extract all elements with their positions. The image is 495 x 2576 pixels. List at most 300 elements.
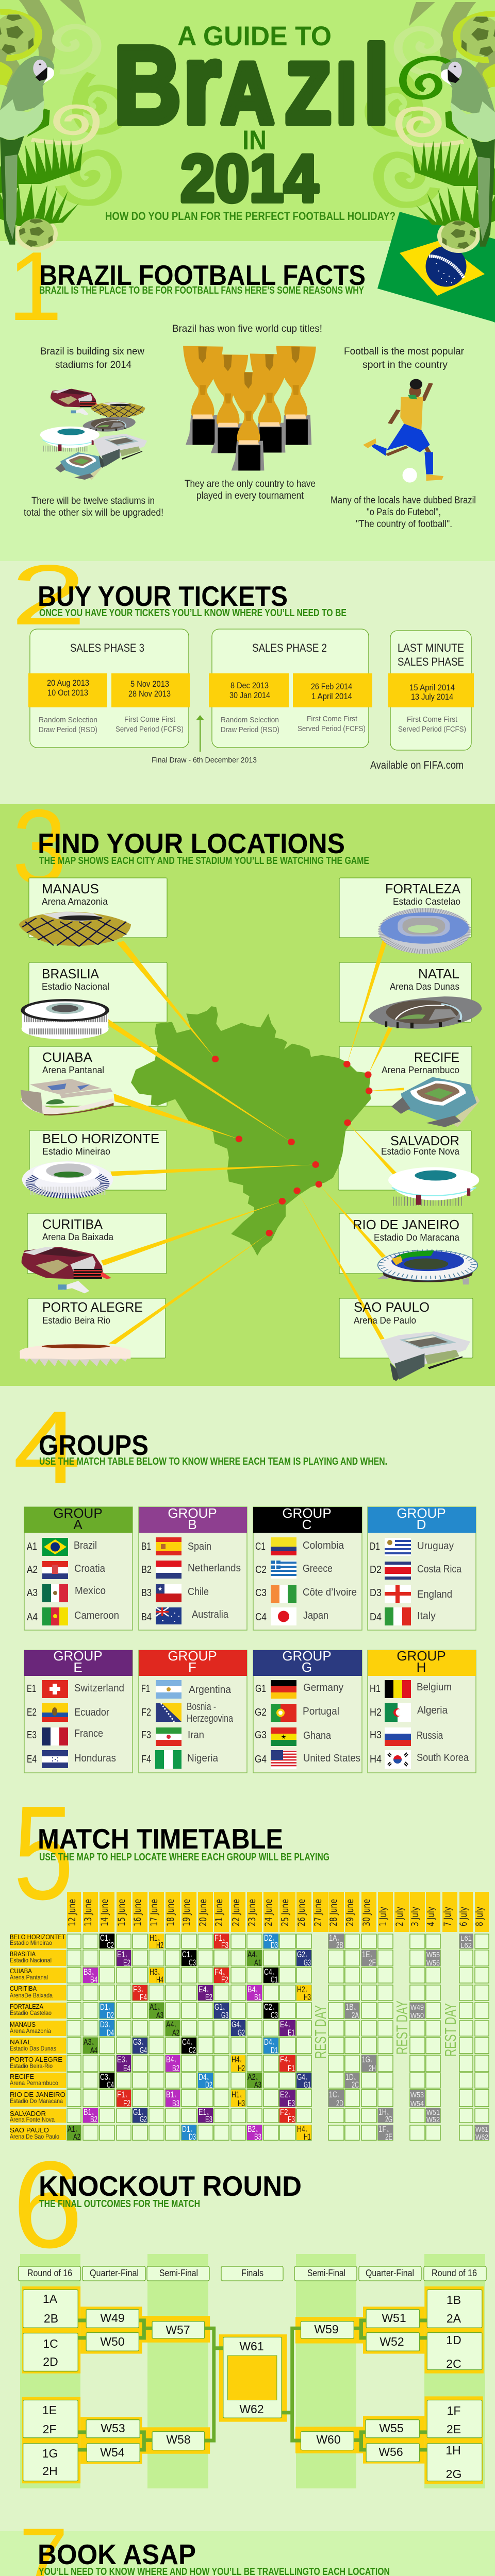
- row matches: Sao Paulo: A1 v.: [68, 2124, 77, 2134]
- panel: group H: Russia: [417, 1730, 443, 1741]
- fact: twelve stadiums: total the other six will be upgraded!: [24, 507, 163, 518]
- panel: group D: D: [417, 1517, 426, 1532]
- title: Brazil: r: [183, 19, 221, 147]
- row matches: Recife: A2 v.: [248, 2072, 258, 2082]
- row matches: Rio de Janeiro: 1C v.: [329, 2090, 339, 2099]
- bracket yellow blocks: [22, 2286, 484, 2484]
- panel: group G: G3: [255, 1730, 267, 1741]
- panel: group G: United States: [303, 1753, 360, 1764]
- timetable venue labels: RECIFE: [10, 2073, 34, 2080]
- row matches: Manaus: D4: [107, 2028, 114, 2038]
- row matches: Sao Paulo: A2: [73, 2132, 80, 2142]
- panel: group C: [253, 1505, 362, 1630]
- row matches: Porto Alegre: E4: [123, 2063, 130, 2073]
- city cards backgrounds: [27, 878, 473, 1358]
- panel: sales phase 3: [28, 629, 190, 748]
- panel: group D: [368, 1505, 476, 1630]
- panel: group E: [24, 1648, 133, 1773]
- bracket labels: 2C: [446, 2357, 461, 2370]
- row matches: Sao Paulo: H4 v.: [297, 2124, 307, 2134]
- row matches: Salvador: F2 v.: [280, 2107, 290, 2117]
- panel: group E: E2: [27, 1707, 37, 1718]
- bracket labels: 2F: [43, 2422, 56, 2436]
- bracket stage headers: Round of 16: [432, 2268, 477, 2278]
- heading: book asap: BOOK ASAP: [38, 2538, 196, 2570]
- panel: sales phase 2: SALES PHASE 2: [252, 641, 327, 654]
- timetable venue labels: CUIABA: [10, 1967, 32, 1975]
- row matches: Salvador: [83, 2107, 440, 2124]
- sections 4 to 6 background: [0, 1386, 495, 2531]
- panel: group B: Spain: [188, 1541, 211, 1552]
- row matches: Recife: D2: [205, 2080, 212, 2090]
- bracket labels: 1H: [446, 2444, 461, 2457]
- connector lines: [101, 939, 404, 1344]
- timetable venue labels: PORTO ALEGRE: [10, 2056, 62, 2063]
- panel: group B: Chile: [188, 1586, 209, 1598]
- heading: Brazil football facts: BRAZIL FOOTBALL FACTS: [39, 259, 366, 291]
- left city labels: PORTO ALEGRE: [42, 1299, 143, 1315]
- rest day labels: REST DAY: [441, 2003, 459, 2057]
- row matches: Sao Paulo: W62: [475, 2133, 488, 2142]
- heading: knockout round: KNOCKOUT ROUND: [39, 2170, 302, 2202]
- row matches: Curitiba: F3 v.: [133, 1985, 143, 1994]
- panel: group D: England: [417, 1589, 452, 1600]
- row matches: Belo Horizonte: F3: [221, 1940, 228, 1950]
- panel: group C: C: [302, 1517, 311, 1532]
- row matches: Cuiaba: H3 v.: [150, 1967, 160, 1977]
- row matches: Cuiaba: F4 v.: [214, 1967, 225, 1977]
- row matches: Rio de Janeiro: E3: [288, 2098, 295, 2108]
- row matches: Cuiaba: [83, 1967, 278, 1985]
- bracket stage headers: Semi-Final: [159, 2268, 198, 2278]
- timetable date header: 17 June: [148, 1899, 160, 1926]
- panel: sales phase 2: Random Selection: [221, 716, 279, 724]
- row matches: Rio de Janeiro: W53: [410, 2091, 424, 2099]
- panel: sales phase 3: First Come First: [124, 715, 176, 724]
- row matches: Salvador: 2G: [385, 2114, 392, 2124]
- timetable venue labels: BRASITIA: [10, 1950, 36, 1958]
- panel: group A: GROUP: [53, 1505, 103, 1521]
- left city labels: CUIABA: [42, 1049, 93, 1065]
- heading: find your locations: THE MAP SHOWS EACH CITY AND THE STADIUM YOU’LL BE WATCHING THE GAME: [39, 855, 369, 867]
- panel: group F: F2: [141, 1707, 151, 1718]
- row matches: Curitiba: E2: [205, 1992, 212, 2002]
- panel: group F: [139, 1648, 247, 1773]
- row matches: Porto Alegre: B4 v.: [166, 2055, 176, 2064]
- row matches: Porto Alegre: E3 v.: [117, 2055, 127, 2064]
- row matches: Salvador: B1 v.: [84, 2107, 94, 2117]
- panel: group B: B: [188, 1517, 197, 1532]
- row matches: Rio de Janeiro: W54: [410, 2099, 424, 2108]
- panel: group F: Argentina: [189, 1684, 232, 1696]
- panel: group A: A: [73, 1517, 82, 1532]
- heading: groups: USE THE MATCH TABLE BELOW TO KNOW WHERE EACH TEAM IS PLAYING AND WHEN.: [39, 1456, 387, 1467]
- row matches: Salvador: B2: [90, 2114, 97, 2124]
- panel: group C: Côte d’Ivoire: [303, 1587, 357, 1598]
- row matches: Sao Paulo: D1 v.: [182, 2124, 192, 2134]
- panel: group E: Honduras: [74, 1753, 116, 1764]
- fact: only country: They are the only country to have: [185, 479, 316, 489]
- fact: only country: played in every tournament: [196, 490, 304, 501]
- row matches: Cuiaba: B3 v.: [84, 1967, 94, 1977]
- row matches: Manaus: E4 v.: [280, 2020, 290, 2029]
- panel: group B: B1: [141, 1541, 151, 1552]
- panel: group H: South Korea: [417, 1752, 469, 1764]
- bracket labels: 1B: [447, 2293, 461, 2307]
- heading: Brazil football facts: BRAZIL IS THE PLACE TO BE FOR FOOTBALL FANS HERE’S SOME REASONS WHY: [39, 285, 365, 296]
- row matches: Rio de Janeiro: H3: [238, 2098, 245, 2108]
- row matches: Porto Alegre: H4 v.: [232, 2055, 242, 2064]
- Brazilian flag: [377, 212, 495, 323]
- panel: sales phase 2: 1 April 2014: [311, 691, 352, 701]
- panel: group E: Switzerland: [74, 1683, 124, 1694]
- timetable date header: 21 June: [213, 1899, 225, 1926]
- left city labels: BELO HORIZONTE: [42, 1131, 159, 1146]
- fact: new stadiums: stadiums for 2014: [55, 360, 131, 370]
- bracket labels: 2A: [447, 2312, 461, 2325]
- row matches: Recife: 1D v.: [345, 2072, 356, 2082]
- timetable date header: 16 June: [132, 1899, 143, 1926]
- row matches: Porto Alegre: 2H: [369, 2063, 376, 2073]
- bracket labels: W55: [379, 2421, 404, 2435]
- bracket labels: W52: [380, 2335, 404, 2348]
- row matches: Natal: D1: [271, 2045, 278, 2055]
- left city labels: Arena Da Baixada: [42, 1232, 114, 1242]
- right city labels: NATAL: [418, 966, 459, 981]
- row matches: Natal: A3 v.: [84, 2037, 94, 2047]
- bracket labels: W61: [239, 2340, 264, 2353]
- timetable date header: 13 June: [82, 1899, 94, 1926]
- timetable venue labels: FORTALEZA: [10, 2003, 43, 2010]
- row matches: Belo Horizonte: H2: [156, 1940, 163, 1950]
- fact: country of football: "The country of football".: [356, 519, 452, 530]
- row matches: Curitiba: H3: [304, 1992, 311, 2002]
- row matches: Fortaleza: C3: [271, 2010, 278, 2020]
- panel: group H: Belgium: [417, 1682, 452, 1693]
- row matches: Salvador: W51: [426, 2108, 440, 2117]
- right city labels: SALVADOR: [390, 1133, 459, 1148]
- row matches: Fortaleza: C2 v.: [264, 2002, 274, 2012]
- fact: most popular sport: sport in the country: [362, 360, 448, 370]
- rest day labels: REST DAY: [393, 2001, 411, 2055]
- row matches: Curitiba: B4 v.: [248, 1985, 258, 1994]
- row matches: Fortaleza: A1 v.: [150, 2002, 160, 2012]
- timetable date header: 3 July: [409, 1907, 421, 1926]
- timetable venue labels: BELO HORIZONTET: [10, 1933, 65, 1941]
- panel: sales phase 3: 10 Oct 2013: [47, 688, 88, 698]
- left city labels: BRASILIA: [42, 966, 100, 981]
- row matches: Manaus: A4 v.: [166, 2020, 176, 2029]
- heading: buy your tickets: BUY YOUR TICKETS: [38, 580, 288, 612]
- bracket labels: W57: [166, 2323, 190, 2336]
- left city labels: Estadio Mineirao: [42, 1146, 110, 1157]
- row matches: Fortaleza: W49: [410, 2003, 424, 2012]
- row matches: Recife: 2C: [352, 2080, 359, 2090]
- subtitle: HOW DO YOU PLAN FOR THE PERFECT FOOTBALL HOLIDAY?: [105, 210, 395, 223]
- footballer: [363, 379, 443, 483]
- panel: group E: GROUP: [53, 1648, 103, 1664]
- five trophies: [183, 346, 316, 470]
- timetable date header: 6 July: [458, 1907, 469, 1926]
- row matches: Brasilia: A1: [254, 1958, 261, 1968]
- row matches: Curitiba: B1: [254, 1992, 261, 2002]
- panel: group B: Australia: [192, 1609, 229, 1620]
- row matches: Manaus: G2: [238, 2028, 245, 2038]
- timetable date header: 15 June: [116, 1899, 127, 1926]
- bracket stage headers: Quarter-Final: [90, 2268, 139, 2278]
- fact: twelve stadiums: There will be twelve stadiums in: [31, 496, 155, 506]
- row matches: Brasilia: W55: [426, 1951, 440, 1959]
- panel: group A: A1: [27, 1541, 37, 1552]
- timetable date header: 7 July: [442, 1907, 453, 1926]
- panel: group H: H4: [370, 1754, 382, 1765]
- row matches: Salvador: F3: [288, 2114, 295, 2124]
- timetable venue labels: CURITIBA: [10, 1985, 37, 1992]
- section number 3: 3: [12, 788, 67, 906]
- row matches: Sao Paulo: H1: [304, 2132, 311, 2142]
- title: 2014: 2014: [180, 141, 318, 216]
- timetable date header: 18 June: [165, 1899, 176, 1926]
- bracket stage headers: [19, 2266, 486, 2281]
- right city labels: FORTALEZA: [385, 881, 461, 896]
- section number 4: 4: [13, 1390, 81, 1505]
- bracket labels: 1D: [446, 2333, 461, 2347]
- panel: group B: Netherlands: [188, 1563, 241, 1574]
- timetable venue labels: MANAUS: [10, 2021, 36, 2028]
- row matches: Brasilia: [117, 1950, 440, 1968]
- timetable date header: 20 June: [197, 1899, 209, 1926]
- header background: [0, 0, 495, 241]
- row matches: Curitiba: E4 v.: [199, 1985, 209, 1994]
- panel: group F: F4: [141, 1754, 151, 1765]
- timetable venue labels: Estadio Beira-Rio: [10, 2062, 53, 2070]
- left city labels: Estadio Beira Rio: [42, 1315, 110, 1326]
- title: Brazil: B: [113, 24, 182, 147]
- row matches: Porto Alegre: F1: [288, 2063, 295, 2073]
- row matches: Fortaleza: D1 v.: [100, 2002, 110, 2012]
- panel: group B: [139, 1505, 247, 1630]
- fact: five titles: Brazil has won five world cup titles!: [172, 324, 322, 334]
- heading: book asap: [38, 2538, 390, 2576]
- panel: group B: B3: [141, 1587, 152, 1599]
- fact: new stadiums: [40, 346, 144, 370]
- bracket cards: [23, 2290, 482, 2481]
- panel: sales phase 2: 30 Jan 2014: [229, 690, 270, 700]
- row matches: Rio de Janeiro: H1 v.: [232, 2090, 242, 2099]
- bracket labels: 1C: [43, 2337, 58, 2350]
- right city labels: Estadio Castelao: [393, 896, 460, 907]
- timetable date header: 23 June: [246, 1899, 258, 1926]
- panel: last minute sales phase: [388, 631, 474, 750]
- panel: last minute sales phase: LAST MINUTE: [398, 641, 464, 654]
- panel: group G: G4: [255, 1754, 267, 1765]
- row matches: Porto Alegre: B2: [172, 2063, 179, 2073]
- panel: group C: C1: [255, 1541, 266, 1552]
- row matches: Belo Horizonte: 1A v.: [329, 1933, 339, 1943]
- bracket labels: W50: [100, 2335, 125, 2348]
- row matches: Natal: A4: [90, 2045, 97, 2055]
- row matches: Belo Horizonte: 2B: [336, 1940, 343, 1950]
- panel: sales phase 3: 20 Aug 2013: [47, 678, 89, 688]
- panel: sales phase 2: First Come First: [307, 715, 358, 723]
- row matches: Fortaleza: 1B v.: [345, 2002, 356, 2012]
- timetable venue labels: Estadio Mineirao: [10, 1939, 52, 1946]
- row matches: Salvador: E1 v.: [199, 2107, 209, 2117]
- panel: group E: E3: [27, 1730, 37, 1741]
- panel: last minute sales phase: SALES PHASE: [398, 655, 464, 668]
- timetable date header: 8 July: [474, 1907, 485, 1926]
- section number 1: 1: [8, 232, 62, 341]
- section number 5: 5: [13, 1778, 74, 1928]
- bracket labels: W54: [100, 2446, 125, 2459]
- row matches: Cuiaba: H4: [156, 1975, 163, 1985]
- panel: group C: C2: [255, 1564, 267, 1575]
- panel: sales phase 2: Draw Period (RSD): [221, 725, 279, 734]
- left jungle decoration: parrot, ball, palms, swirls: [0, 0, 125, 251]
- panel: sales phase 3: Draw Period (RSD): [39, 725, 97, 734]
- panel: group F: F1: [141, 1683, 150, 1694]
- timetable date header: [67, 1892, 489, 1932]
- panel: sales phase 2: 26 Feb 2014: [311, 682, 352, 691]
- right jungle decoration: parrot, ball, palms, swirls: [370, 2, 495, 253]
- row matches: Brasilia: 1E v.: [362, 1950, 372, 1959]
- right city labels: SAO PAULO: [354, 1299, 430, 1315]
- row matches: Salvador: G2: [140, 2114, 147, 2124]
- right city labels: RECIFE: [414, 1049, 459, 1065]
- row matches: Natal: [83, 2037, 278, 2055]
- panel: group E: E: [73, 1659, 82, 1675]
- panel: sales phase 3: SALES PHASE 3: [70, 641, 144, 654]
- row matches: Belo Horizonte: D3: [271, 1940, 278, 1950]
- bracket labels: 1E: [42, 2403, 57, 2417]
- row matches: Porto Alegre: 1G v.: [362, 2055, 372, 2064]
- bracket labels: W51: [382, 2311, 406, 2325]
- panel: last minute sales phase: Served Period (FCFS): [398, 725, 466, 734]
- timetable date header: 12 June: [67, 1899, 78, 1926]
- panel: group C: GROUP: [282, 1505, 332, 1521]
- row matches: Manaus: [100, 2020, 295, 2038]
- left city labels: Arena Amazonia: [42, 896, 108, 907]
- row matches: Sao Paulo: B2 v.: [248, 2124, 258, 2134]
- row matches: Porto Alegre: [117, 2055, 376, 2073]
- row matches: Brasilia: C1 v.: [182, 1950, 192, 1959]
- row matches: Natal: C2: [189, 2045, 196, 2055]
- panel: group H: H2: [370, 1707, 382, 1718]
- timetable date header: 4 July: [425, 1907, 437, 1926]
- row matches: Recife: C3 v.: [100, 2072, 110, 2082]
- panel: group A: Mexico: [75, 1585, 106, 1597]
- timetable venue labels: SAO PAULO: [10, 2126, 49, 2134]
- row matches: Brasilia: G2 v.: [297, 1950, 307, 1959]
- section 7 background: [0, 2531, 495, 2576]
- row matches: Belo Horizonte: C2: [107, 1940, 114, 1950]
- panel: group F: GROUP: [168, 1648, 217, 1664]
- timetable date header: 25 June: [279, 1899, 291, 1926]
- panel: group C: Greece: [303, 1563, 333, 1574]
- left city labels: CURITIBA: [42, 1216, 103, 1232]
- heading: groups: [39, 1429, 387, 1467]
- right city labels: RIO DE JANEIRO: [353, 1217, 459, 1232]
- row matches: Curitiba: F4: [140, 1992, 147, 2002]
- row matches: Sao Paulo: W61: [475, 2125, 488, 2134]
- bracket stage headers: Quarter-Final: [366, 2268, 414, 2278]
- panel: group C: Colombia: [303, 1540, 344, 1551]
- right city labels: Estadio Fonte Nova: [381, 1146, 460, 1157]
- row matches: Fortaleza: G3: [221, 2010, 228, 2020]
- panel: group F: Herzegovina: [187, 1713, 234, 1724]
- bracket stage headers: Semi-Final: [307, 2268, 345, 2278]
- panel: group F: Nigeria: [187, 1753, 219, 1764]
- row matches: Recife: A3: [254, 2080, 261, 2090]
- bracket labels: [42, 2292, 461, 2481]
- panel: group D: Italy: [417, 1611, 436, 1622]
- bracket labels: 2G: [446, 2467, 461, 2481]
- row matches: Belo Horizonte: L62: [460, 1941, 472, 1950]
- panel: sales phase 2: 8 Dec 2013: [230, 681, 269, 690]
- row matches: Brasilia: G3: [304, 1958, 311, 1968]
- panel: group H: H: [417, 1659, 426, 1675]
- timetable date header: 2 July: [394, 1907, 405, 1926]
- city pins: [212, 1056, 372, 1236]
- row matches: Natal: D4 v.: [264, 2037, 274, 2047]
- row matches: Rio de Janeiro: 2D: [336, 2098, 343, 2108]
- row matches: Rio de Janeiro: F2: [123, 2098, 130, 2108]
- left city labels: Estadio Nacional: [42, 981, 109, 992]
- panel: group A: Croatia: [74, 1563, 106, 1574]
- timetable venue labels: Arena Pernambuco: [10, 2079, 58, 2087]
- panel: last minute sales phase: First Come First: [407, 715, 458, 724]
- bracket column backgrounds: [20, 2254, 485, 2488]
- row matches: Fortaleza: W50: [410, 2011, 424, 2020]
- fact: twelve stadiums: [24, 496, 163, 518]
- row matches: Rio de Janeiro: F1 v.: [117, 2090, 127, 2099]
- timetable grid cells: [67, 1934, 489, 2140]
- panel: group D: D1: [370, 1541, 380, 1552]
- timetable venue labels: Arena Pantanal: [10, 1974, 48, 1981]
- row matches: Curitiba: H2 v.: [297, 1985, 307, 1994]
- row matches: Rio de Janeiro: E2 v.: [280, 2090, 290, 2099]
- bracket stage headers: Finals: [241, 2268, 263, 2278]
- panel: group H: [368, 1648, 476, 1773]
- title: A GUIDE TO: A GUIDE TO: [177, 21, 332, 52]
- row matches: Porto Alegre: H2: [238, 2063, 245, 2073]
- bracket labels: 2E: [447, 2422, 461, 2436]
- heading: match timetable: MATCH TIMETABLE: [38, 1823, 283, 1855]
- panel: sales phase 3: 28 Nov 2013: [128, 689, 171, 699]
- row matches: Belo Horizonte: C1 v.: [100, 1933, 110, 1943]
- timetable date header: 1 July: [377, 1907, 389, 1926]
- panel: group D: D3: [370, 1587, 382, 1599]
- title: Brazil: Z: [286, 45, 331, 142]
- panel: sales phase 3: Served Period (FCFS): [116, 725, 184, 734]
- bracket labels: 1F: [447, 2404, 460, 2417]
- timetable date header: 30 June: [361, 1899, 372, 1926]
- bracket labels: W60: [316, 2433, 341, 2446]
- bracket labels: 2D: [43, 2355, 58, 2368]
- timetable venue labels: Arena Amazonia: [10, 2027, 51, 2035]
- panel: last minute sales phase: 13 July 2014: [411, 692, 453, 702]
- row matches: Belo Horizonte: F1 v.: [214, 1933, 225, 1943]
- panel: group A: Cameroon: [74, 1610, 119, 1621]
- timetable date header: 29 June: [344, 1899, 356, 1926]
- panel: sales phase 2: Served Period (FCFS): [298, 724, 366, 733]
- dark green spiral right: [403, 58, 448, 97]
- bracket labels: W49: [100, 2311, 125, 2325]
- heading: match timetable: USE THE MAP TO HELP LOCATE WHERE EACH GROUP WILL BE PLAYING: [39, 1852, 329, 1863]
- section number 2: 2: [10, 548, 87, 643]
- panel: group G: Ghana: [303, 1730, 332, 1741]
- right city labels: Estadio Do Maracana: [374, 1232, 460, 1243]
